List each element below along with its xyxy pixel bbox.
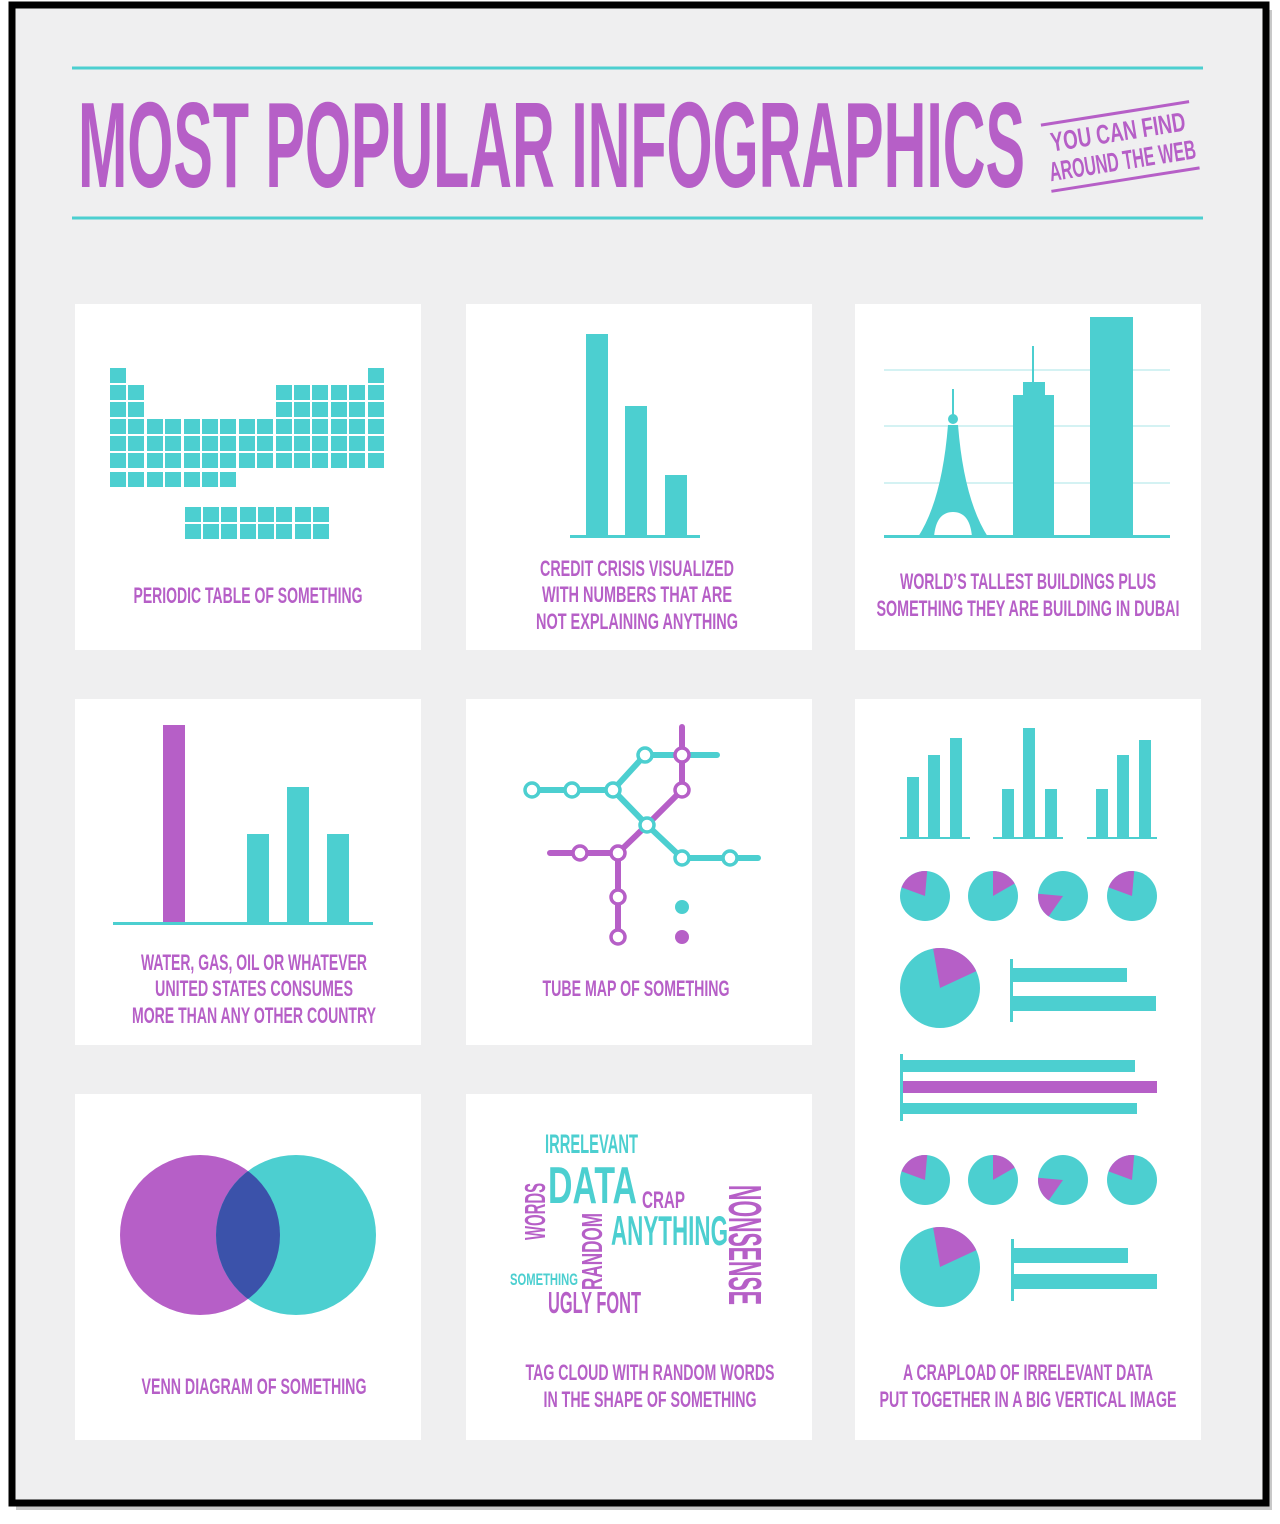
big pie with bars 2 [900,1227,1157,1307]
caption [132,950,376,1028]
caption [526,1360,774,1412]
icon: venn diagram [120,1155,376,1315]
big pie with bars 1 [900,948,1156,1028]
bar chart groups [900,728,1157,839]
tag cloud words: WORDS [520,1183,552,1240]
caption: TUBE MAP OF SOMETHING [542,976,730,1001]
caption: CREDIT CRISIS VISUALIZED [540,556,734,581]
panel: credit crisis [466,304,812,650]
tag cloud words: ANYTHING [611,1207,728,1254]
tag cloud words [510,1129,771,1320]
caption: NOT EXPLAINING ANYTHING [536,609,738,634]
subtitle badge [1041,102,1200,191]
tag cloud words: DATA [548,1157,637,1215]
bar chart [570,334,700,538]
tag cloud words: IRRELEVANT [545,1129,638,1159]
panel: periodic table [75,304,421,650]
caption [536,556,738,634]
caption: VENN DIAGRAM OF SOMETHING [142,1374,366,1399]
panel: venn [75,1094,421,1440]
bar chart [113,725,373,925]
pie charts row 1 [900,871,1157,921]
caption [876,569,1180,621]
tag cloud words: UGLY FONT [548,1285,641,1320]
icon: buildings chart [884,317,1170,538]
panel: US consumption [75,699,421,1045]
panel: tube map [466,699,812,1045]
panel: tag cloud [466,1094,812,1440]
icon: periodic table grid [110,368,384,539]
caption: UNITED STATES CONSUMES [155,976,353,1001]
panel: crapload of data [855,699,1201,1440]
pie charts row 2 [900,1155,1157,1205]
tag cloud words: CRAP [642,1187,685,1214]
caption: WATER, GAS, OIL OR WHATEVER [141,950,367,975]
tag cloud words: SOMETHING [510,1270,578,1289]
caption: MORE THAN ANY OTHER COUNTRY [132,1003,376,1028]
caption: TAG CLOUD WITH RANDOM WORDS [526,1360,774,1385]
subtitle badge: YOU CAN FIND [1048,107,1187,158]
caption: IN THE SHAPE OF SOMETHING [544,1387,756,1412]
caption: WITH NUMBERS THAT ARE [542,582,732,607]
panel: tallest buildings [855,304,1201,650]
horizontal bars [900,1054,1157,1121]
tag cloud words: NONSENSE [719,1185,771,1305]
caption [880,1360,1176,1412]
icon: tube map [525,727,758,944]
caption: PERIODIC TABLE OF SOMETHING [134,583,362,608]
tag cloud words: RANDOM [577,1213,609,1290]
